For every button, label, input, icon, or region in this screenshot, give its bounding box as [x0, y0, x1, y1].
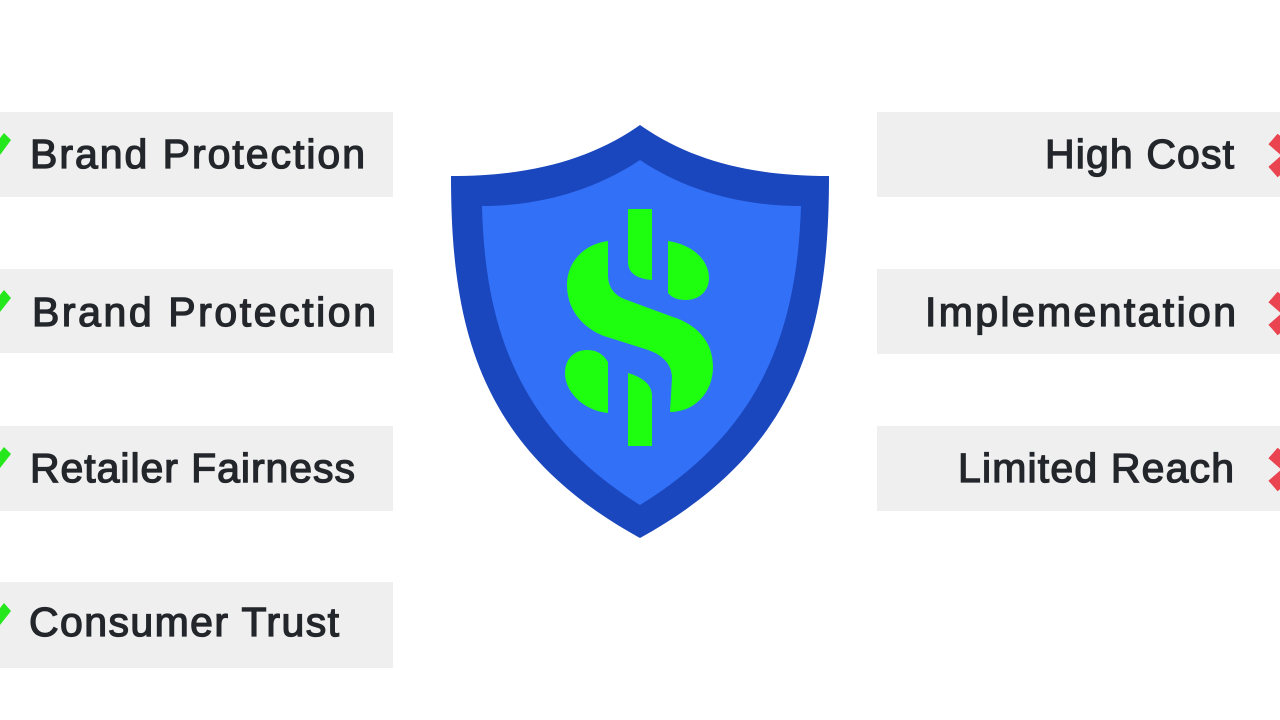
drawback row: High Cost: High Cost	[1045, 131, 1235, 177]
drawback row: Implementation: Implementation	[925, 289, 1236, 335]
shield outer border	[451, 125, 829, 538]
drawback row: High Cost	[877, 112, 1280, 197]
benefit row: Consumer Trust	[0, 582, 393, 668]
dollar sign	[565, 209, 713, 446]
benefit row: Brand Protection	[0, 112, 393, 197]
benefit row: Brand Protection (second)	[0, 269, 393, 353]
panel: drawbacks column	[877, 112, 1280, 511]
benefit row: Brand Protection: Brand Protection	[30, 131, 365, 177]
benefit row: Retailer Fairness: Retailer Fairness	[30, 445, 355, 491]
shield inner face	[482, 160, 801, 505]
drawback row: Implementation	[877, 269, 1280, 354]
benefit row: Retailer Fairness	[0, 426, 393, 511]
drawback row: Limited Reach	[877, 426, 1280, 511]
benefit row: Consumer Trust: Consumer Trust	[29, 599, 340, 645]
benefit row: Brand Protection (second): Brand Protection	[32, 289, 376, 335]
panel: benefits column	[0, 112, 393, 668]
drawback row: Limited Reach: Limited Reach	[958, 445, 1234, 491]
icon: shield with dollar sign	[451, 125, 829, 538]
